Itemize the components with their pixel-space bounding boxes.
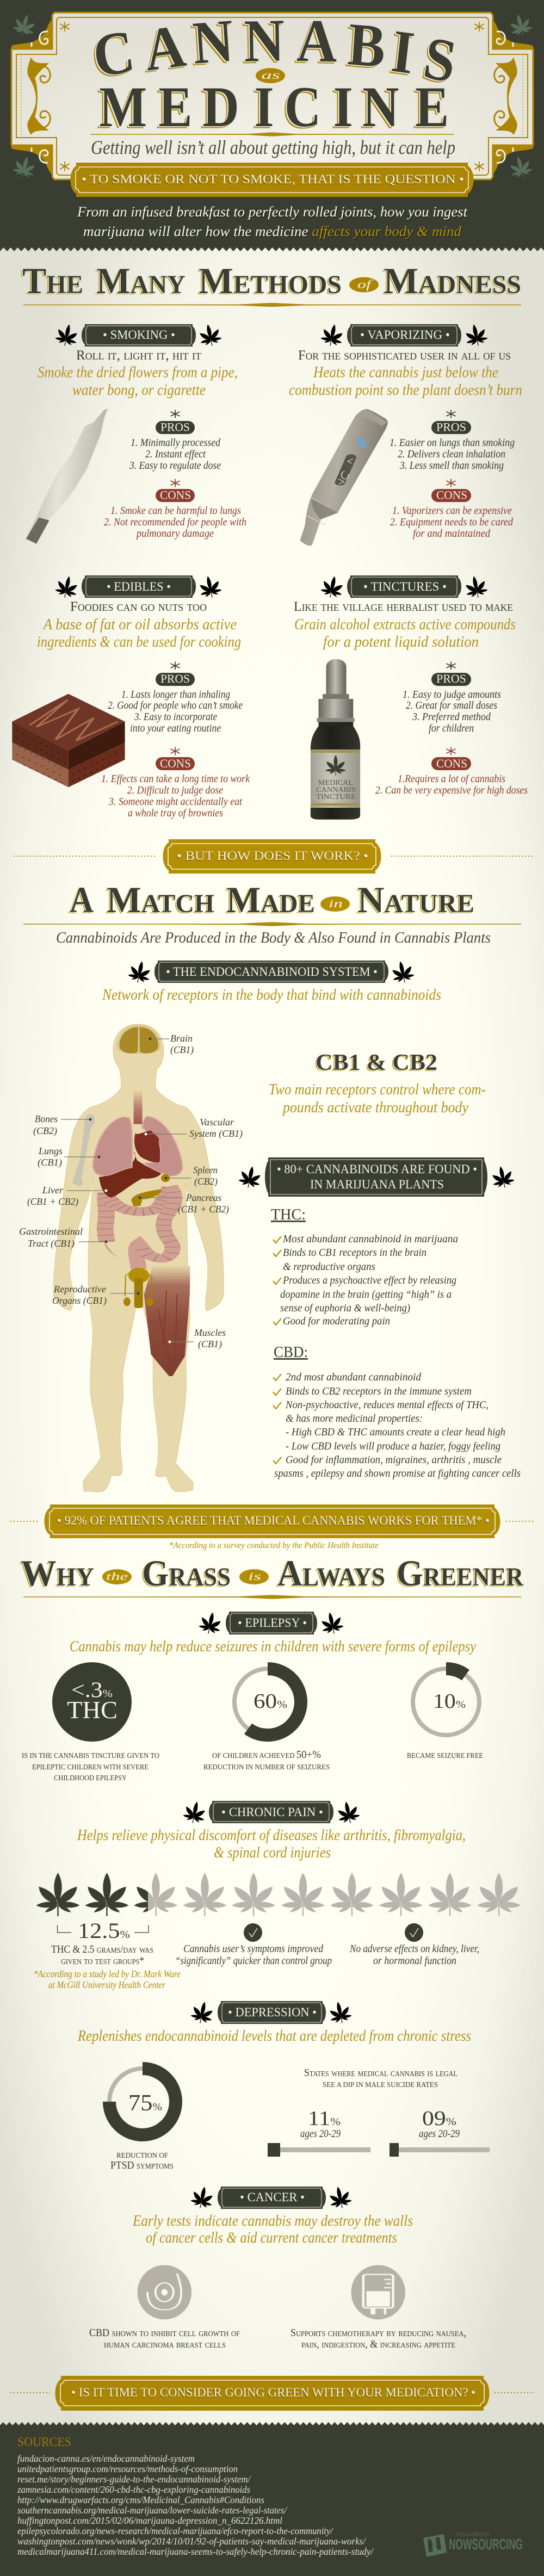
badge: epilepsy: • EPILEPSY • [238,1616,307,1630]
heading: a match made in nature [70,879,474,920]
stat: 11 percent [268,2107,370,2157]
heading: the many methods of madness: The [22,260,83,301]
stat captions: OF CHILDREN ACHIEVED 50+% [212,1749,321,1761]
organ labels: System (CB1) [189,1128,243,1140]
description: Network of receptors in the body that bind with cannabinoids [102,986,441,1004]
header plaque [11,7,533,179]
panel: depression [77,1999,490,2171]
stat captions [22,1749,483,1782]
check: symptoms improved: “significantly” quicker than control group [175,1955,332,1967]
cons: 3. Someone might accidentally eat [108,796,242,808]
heading: a match made in nature: Made [226,879,315,920]
badge: endocannabinoid system [127,959,416,985]
badge: cancer [189,2184,353,2210]
stat: 12.5 percent: 12.5 % [78,1918,130,1943]
organ labels: Lungs [38,1145,63,1156]
footer band [0,2422,544,2576]
pros [403,661,501,734]
stat: 12.5 percent [34,1918,181,1990]
logo: nowsourcing: DEVELOPED BY [456,2532,490,2537]
stat: suicide rates: SEE A DIP IN MALE SUICIDE RATES [323,2080,438,2089]
stat captions: CHILDHOOD EPILEPSY [54,1774,127,1782]
leaf: header ornaments [11,12,534,180]
stat captions: IS IN THE CANNABIS TINCTURE GIVEN TO [22,1751,159,1760]
sources list: unitedpatientsgroup.com/resources/methods-of-consumption [17,2463,238,2474]
organs [72,1089,190,1376]
heading: why the grass is always greener [21,1552,524,1594]
organ labels: Gastrointestinal [19,1226,83,1237]
cons: CONS [160,757,191,770]
stat: 11 percent: ages 20-29 [300,2128,341,2140]
organ labels: (CB1 + CB2) [27,1196,78,1208]
title [89,7,461,139]
leader lines and dots [61,1038,194,1343]
badge: 80+ cannabinoids: IN MARIJUANA PLANTS [310,1178,444,1191]
stat: 09 percent [390,2107,490,2157]
title connector: as: as [261,70,280,82]
sources list: washingtonpost.com/news/wonk/wp/2014/10/01/92-of-patients-say-medical-marijuana-works/ [17,2536,367,2547]
donut: 60 percent [234,1669,301,1735]
badge: edibles: • EDIBLES • [107,580,171,593]
stat: 11 percent: 11% [308,2107,341,2130]
dark header band [0,0,544,247]
banner: to smoke or not to smoke: • TO SMOKE OR NOT TO SMOKE, THAT IS THE QUESTION • [82,172,464,186]
cons: a whole tray of brownies [128,807,223,819]
stat: 12.5 percent: given to test groups* [61,1955,144,1967]
thc stat circle: <.3 % [71,1677,113,1702]
sources list: epilepsycolorado.org/news-research/medical-marijuana/efco-report-to-the-community/ [17,2525,334,2536]
panel: cbd [273,1344,521,1479]
description: for a potent liquid solution [323,633,479,651]
pros: 1. Easy to judge amounts [403,689,501,701]
donut: 75 percent: REDUCTION OF [116,2151,168,2159]
divider [23,1595,521,1599]
cons: 2. Not recommended for people with [104,516,246,528]
thc heading: THC: [271,1206,306,1223]
cons: 2. Difficult to judge dose [127,784,223,796]
asterisks [60,22,484,171]
banner: to smoke or not to smoke [71,163,473,197]
pros: 2. Good for people who can’t smoke [108,699,243,711]
description [289,363,522,399]
pros: 3. Less smell than smoking [399,460,504,472]
thc list [280,1233,458,1327]
cbd heading: CBD: [274,1344,308,1361]
heading: the many methods of madness: of [357,277,373,291]
pros: 1. Easier on lungs than smoking [390,437,515,449]
panel: thc [271,1206,458,1327]
sources heading: SOURCES [17,2435,71,2449]
description [38,363,238,399]
pros: 3. Easy to regulate dose [129,460,221,472]
badge: smoking: • SMOKING • [103,328,175,342]
pros: PROS [160,672,190,685]
cons: for and maintained [413,528,491,540]
stat: 12.5 percent: *According to a study led by Dr. Mark Ware [34,1968,181,1979]
badge: chronic pain: • CHRONIC PAIN • [221,1805,323,1819]
badge: chronic pain [182,1799,361,1825]
pros: PROS [160,420,190,434]
checkmarks [273,1236,281,1325]
thc list: dopamine in the brain (getting “high” is a [280,1289,452,1301]
description [269,1081,486,1116]
pros: PROS [436,420,466,434]
organ labels: Tract (CB1) [28,1238,75,1249]
divider [23,303,521,307]
cons [390,479,514,540]
description: Cannabis may help reduce seizures in children with severe forms of epilepsy [70,1638,476,1655]
organ labels: Vascular [200,1117,234,1128]
heading: the many methods of madness: Many [96,260,186,301]
cbd list: & has more medicinal properties: [286,1413,423,1425]
heading: cb1 and cb2: CB1 & CB2 [316,1050,437,1075]
right side scroll [494,57,517,135]
donut: 10 percent [413,1669,479,1735]
donut: 60 percent: 60 % [254,1690,287,1713]
thc list: sense of euphoria & well-being) [280,1302,410,1314]
badge: depression [189,1999,353,2026]
organ labels: Organs (CB1) [52,1295,107,1306]
stat: 12.5 percent: at McGill University Health Center [48,1979,166,1990]
description [294,616,516,651]
brain [117,1025,160,1054]
cbd list: - Low CBD levels will produce a hazier, foggy feeling [286,1440,500,1452]
description: of cancer cells & aid current cancer treatments [146,2229,397,2246]
icon: tincture bottle [311,659,360,820]
description: water bong, or cigarette [72,381,206,399]
thc stat circle: THC [67,1696,118,1724]
badge: smoking [54,322,223,348]
panel: chronic pain [34,1799,521,1990]
badge: depression: • DEPRESSION • [228,2005,317,2019]
thc list: Most abundant cannabinoid in marijuana [282,1233,458,1245]
banner: but how does it work [14,839,534,874]
check: symptoms improved [175,1923,332,1967]
check: no adverse effects: No adverse effects on kidney, liver, [349,1943,479,1955]
badge: cancer: • CANCER • [240,2190,305,2204]
caption: Supports chemotherapy by reducing nausea, [290,2327,466,2339]
organ labels: (CB2) [194,1176,218,1187]
caption: Like the village herbalist used to make [294,599,513,614]
panel: edibles [12,574,250,819]
icon: tincture bottle: MEDICAL [318,779,353,787]
badge: 80+ cannabinoids: • 80+ CANNABINOIDS ARE FOUND • [277,1162,477,1176]
sources list: fundacion-canna.es/en/endocannabinoid-system [17,2453,195,2464]
body diagram [19,1024,243,1492]
cbd list [274,1371,521,1479]
description: Two main receptors control where com- [269,1081,486,1098]
caption [89,2327,240,2350]
organ labels [19,1033,243,1350]
badge: vaporizing [319,322,489,348]
sources list: medicalmarijuana411.com/medical-marijuana-seems-to-safely-help-chronic-pain-patients-study/ [17,2546,374,2557]
badge: tinctures [319,574,489,600]
heading: why the grass is always greener: Why [21,1552,94,1594]
subheading: Cannabinoids Are Produced in the Body & Also Found in Cannabis Plants [56,930,491,946]
survey footnote: *According to a survey conducted by the Public Health Institute [169,1541,379,1550]
stat captions: BECAME SEIZURE FREE [407,1751,483,1760]
stat captions: EPILEPTIC CHILDREN WITH SEVERE [32,1763,149,1771]
pros: PROS [436,672,466,685]
banner: 92 percent: • 92% OF PATIENTS AGREE THAT MEDICAL CANNABIS WORKS FOR THEM* • [57,1514,490,1527]
heading: a match made in nature: Match [107,879,214,920]
sources list: huffingtonpost.com/2015/02/06/marijauna-depression_n_6622126.html [17,2515,282,2526]
description [132,2212,413,2246]
description [77,1826,466,1861]
cbd list: - High CBD & THC amounts create a clear head high [286,1426,505,1438]
icon: tincture bottle: TINCTURE [316,793,356,801]
icon: brownie [12,694,125,787]
check: no adverse effects: or hormonal function [373,1955,456,1967]
cbd list: Non-psychoactive, reduces mental effects of THC, [285,1399,489,1411]
heading: why the grass is always greener: Greener [397,1552,524,1594]
pros: 3. Preferred method [412,711,491,723]
panel: epilepsy [22,1610,483,1782]
cons: 1. Smoke can be harmful to lungs [110,505,241,517]
heading: why the grass is always greener: Grass [142,1552,231,1594]
description [37,616,241,651]
badge: vaporizing: • VAPORIZING • [360,328,450,342]
organ labels: Spleen [193,1165,218,1175]
badge: tinctures: • TINCTURES • [363,580,447,593]
organ labels: (CB1) [198,1339,222,1350]
description: Replenishes endocannabinoid levels that are depleted from chronic stress [77,2027,471,2045]
banner: going green [10,2376,534,2411]
organ labels: Brain [170,1033,193,1044]
pros [108,661,243,734]
intro text: From an infused breakfast to perfectly rolled joints, how you ingest [77,204,468,220]
cons: 1. Vaporizers can be expensive [392,505,512,517]
tagline: Getting well isn’t all about getting high, but it can help [91,137,455,158]
title divider [90,132,454,137]
organ labels: Bones [35,1113,58,1124]
organ labels: (CB1) [170,1044,194,1056]
icon: vaporizer [300,409,388,546]
cbd list: spasms , epilepsy and shown promise at fighting cancer cells [274,1467,521,1479]
thc list: Binds to CB1 receptors in the brain [283,1247,426,1259]
heading: a match made in nature: A [70,879,94,920]
cons: pulmonary damage [135,528,214,540]
pros: 2. Delivers clean inhalation [398,448,505,460]
sources list: zamnesia.com/content/260-cbd-thc-cbg-exploring-cannabinoids [17,2484,250,2495]
checkmarks [273,1374,281,1464]
banner: going green: • IS IT TIME TO CONSIDER GOING GREEN WITH YOUR MEDICATION? • [71,2386,475,2399]
cons: 2. Equipment needs to be cared [390,516,514,528]
heading: a match made in nature: Nature [357,879,474,920]
sources list: reset.me/story/beginners-guide-to-the-endocannabinoid-system/ [17,2474,251,2485]
sources list: http://www.drugwarfacts.org/cms/Medicinal_Cannabis#Conditions [17,2494,264,2505]
icon: iv bag [351,2265,405,2319]
pros: 1. Minimally processed [131,437,221,449]
organ labels: Liver [42,1185,64,1196]
corner ornaments [11,20,533,175]
badge: endocannabinoid system: • THE ENDOCANNABINOID SYSTEM • [166,965,378,979]
donut: 75 percent [109,2069,176,2171]
pros: 2. Great for small doses [406,699,497,711]
pros: 3. Easy to incorporate [134,711,217,723]
title: CANNABIS [89,7,461,96]
pros: into your eating routine [130,722,221,734]
icon: joint [26,408,108,544]
description: Smoke the dried flowers from a pipe, [38,363,238,381]
caption: CBD shown to inhibit cell growth of [89,2327,240,2339]
caption [290,2327,466,2350]
caption: human carcinoma breast cells [104,2338,226,2350]
organ labels: Pancreas [186,1192,221,1203]
stat: 09 percent: ages 20-29 [419,2128,460,2140]
logo: nowsourcing [423,2532,523,2557]
description: Heats the cannabis just below the [313,363,498,381]
left side scroll [27,57,50,135]
stat: suicide rates: States where medical cannabis is legal [304,2067,458,2079]
pros: 2. Instant effect [145,448,206,460]
banner: but how does it work: • BUT HOW DOES IT WORK? • [177,849,368,863]
description: A base of fat or oil absorbs active [42,616,237,633]
heading: a match made in nature: in [329,898,343,910]
cons [104,479,246,540]
stat captions: REDUCTION IN NUMBER OF SEIZURES [203,1763,330,1771]
donut: 75 percent: 75% [128,2091,162,2116]
heading: the many methods of madness: Methods [199,260,342,301]
cons [375,747,528,796]
check: no adverse effects [349,1923,479,1967]
badge: epilepsy [197,1610,345,1636]
pros: for children [429,722,474,734]
description: ingredients & can be used for cooking [37,633,241,651]
badge: edibles [54,574,223,600]
thc stat circle [52,1662,132,1742]
cons: 1.Requires a lot of cannabis [398,773,505,785]
stat: 12.5 percent: THC & 2.5 grams/day was [51,1943,153,1955]
cbd list: Good for inflammation, migraines, arthritis , muscle [286,1454,502,1466]
cons: CONS [436,488,467,501]
panel: tinctures [294,574,528,820]
caption: For the sophisticated user in all of us [298,348,511,363]
description: Early tests indicate cannabis may destroy the walls [132,2212,413,2230]
badge: 80+ cannabinoids [237,1157,516,1197]
stat: suicide rates [268,2067,490,2157]
thc list: Produces a psychoactive effect by releasing [282,1274,456,1286]
intro text: marijuana will alter how the medicine affects your body & mind [83,224,462,239]
thc list: Good for moderating pain [283,1315,390,1327]
icon: breast [138,2265,191,2319]
organ labels: (CB2) [33,1125,57,1137]
banner: 92 percent [10,1504,534,1538]
donut: 10 percent: 10% [433,1690,466,1713]
caption: pain, indigestion, & increasing appetite [301,2338,455,2350]
donut: 75 percent: PTSD symptoms [110,2159,174,2171]
cons: CONS [436,757,467,770]
organ labels: Muscles [194,1327,226,1338]
check: symptoms improved: Cannabis user’s symptoms improved [183,1943,324,1955]
heading: why the grass is always greener: Always [277,1552,385,1594]
heading: the many methods of madness: Madness [384,260,521,301]
sources list [17,2453,374,2557]
description: & spinal cord injuries [214,1844,331,1861]
heading: the many methods of madness [22,260,521,301]
cbd list: Binds to CB2 receptors in the immune system [286,1385,472,1397]
thc list: & reproductive organs [283,1261,375,1273]
panel: smoking [26,322,246,544]
leaf pictogram row [36,1873,521,1916]
caption: Foodies can go nuts too [70,599,207,614]
cons: CONS [160,488,191,501]
title: MEDICINE [99,75,449,139]
pros [129,410,221,472]
description: pounds activate throughout body [282,1099,468,1116]
cbd list: 2nd most abundant cannabinoid [286,1371,422,1383]
title connector: as [256,68,285,83]
stat: 09 percent: 09 % [422,2107,456,2130]
panel: vaporizing [289,322,522,546]
panel: cancer [89,2184,466,2350]
body silhouette [53,1024,224,1492]
intro text [77,204,468,239]
cons: 1. Effects can take a long time to work [101,773,250,785]
divider [23,922,521,926]
heading: why the grass is always greener: the [106,1571,128,1583]
pros [390,410,515,472]
description: Helps relieve physical discomfort of diseases like arthritis, fibromyalgia, [77,1826,466,1844]
organ labels: (CB1) [38,1157,62,1168]
cons [101,747,250,819]
organ labels: Reproductive [53,1284,106,1295]
heading: why the grass is always greener: is [248,1571,261,1583]
caption: Roll it, light it, hit it [76,348,201,363]
pros: 1. Lasts longer than inhaling [121,689,230,701]
organ labels: (CB1 + CB2) [178,1204,229,1215]
icon: tincture bottle: CANNABIS [316,786,356,794]
sources list: southerncannabis.org/medical-marijuana/lower-suicide-rates-legal-states/ [17,2505,288,2516]
cons: 2. Can be very expensive for high doses [375,784,528,796]
